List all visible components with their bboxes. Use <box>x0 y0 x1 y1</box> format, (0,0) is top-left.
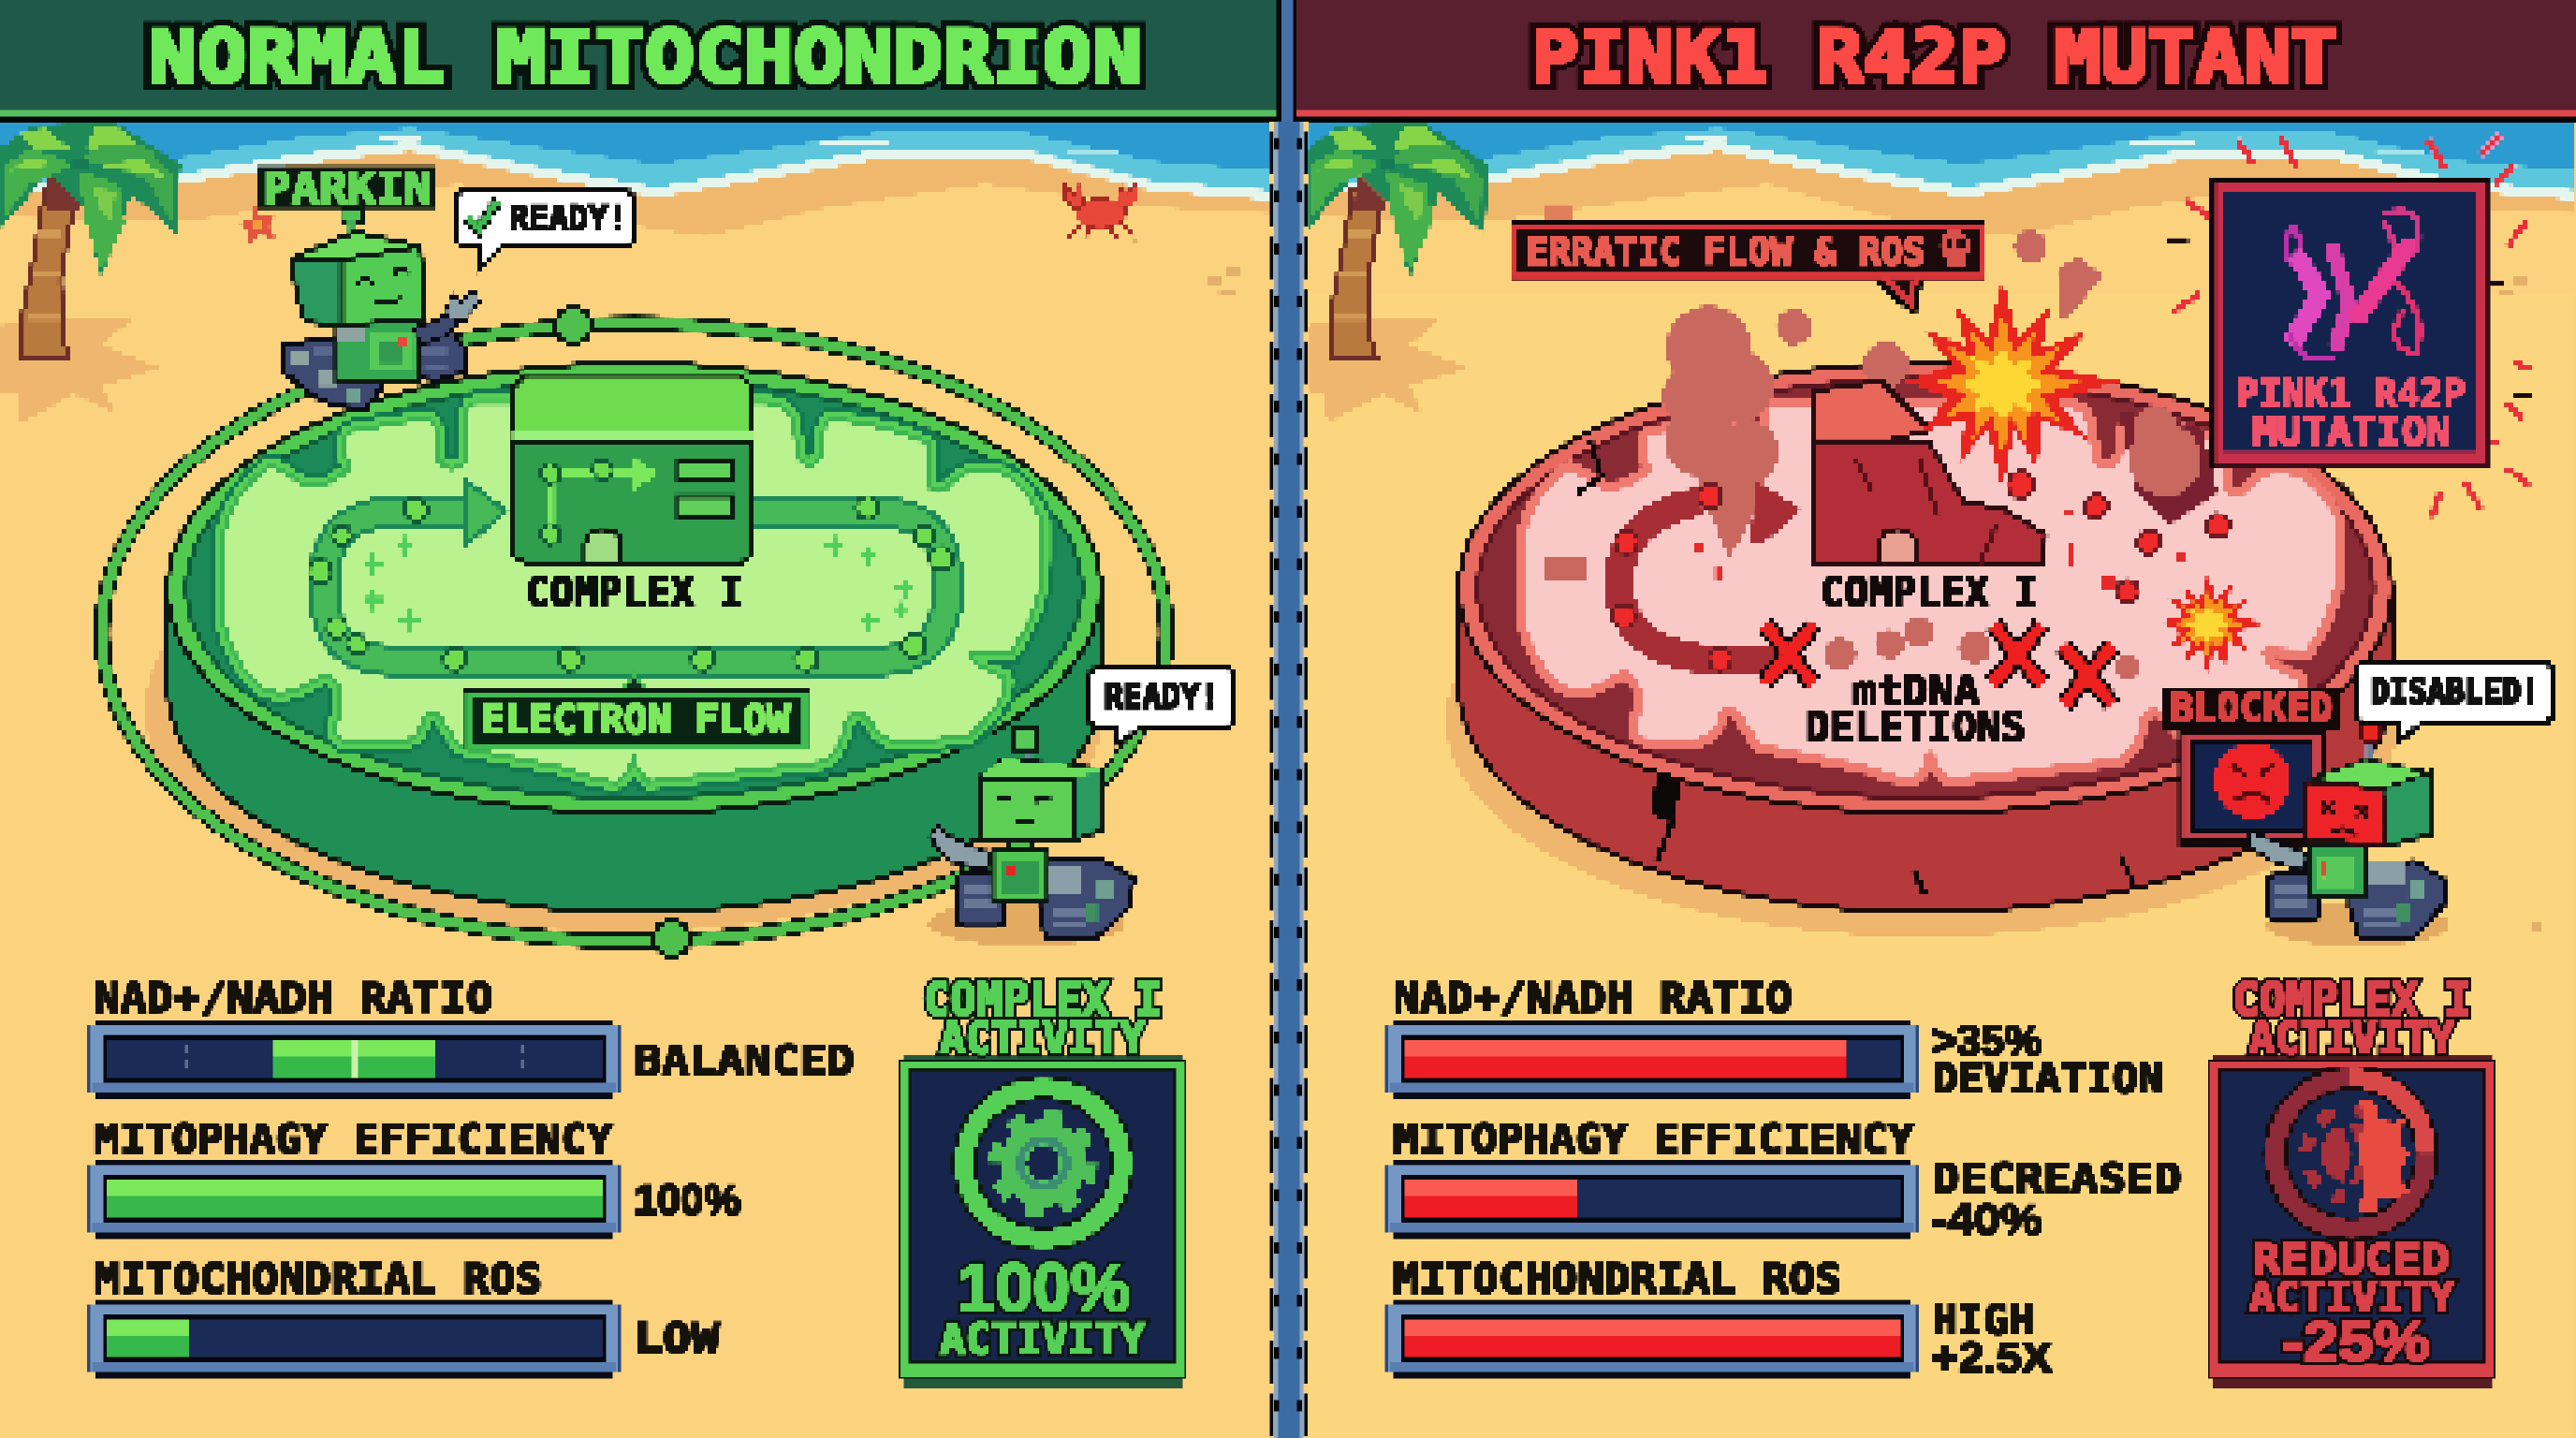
icon: skull <box>1940 230 1969 266</box>
title: normal: NORMAL MITOCHONDRION <box>148 16 1142 100</box>
speech bubble: ready 1 <box>455 191 634 271</box>
broken track <box>1618 501 1791 661</box>
beach scene: mutant side <box>1298 115 2576 1438</box>
value: high: HIGH <box>1932 1297 2034 1344</box>
bar: ROS mutant <box>1385 1299 1919 1379</box>
label: mitophagy mutant: MITOPHAGY EFFICIENCY <box>1393 1116 1914 1164</box>
robot: disabled <box>2247 723 2450 946</box>
smoke <box>1544 230 2202 681</box>
bars: normal metrics <box>87 1020 621 1379</box>
text: activity normal: COMPLEX I <box>923 973 1162 1027</box>
bar: NAD ratio mutant <box>1385 1020 1919 1099</box>
header: normal mitochondrion <box>0 0 1277 123</box>
panel: normal mitochondrion <box>0 115 1281 1438</box>
icon: angry face <box>2215 742 2291 818</box>
text: mutant scene labels <box>1526 230 2539 752</box>
value: low: LOW <box>634 1314 720 1362</box>
text: normal scene labels <box>263 164 1219 742</box>
label: ready 1: READY! <box>509 198 627 239</box>
panel: complex I activity normal <box>899 973 1186 1388</box>
header: PINK1 mutant <box>1296 0 2576 123</box>
mitochondrion: normal <box>102 307 1166 956</box>
panel: complex I activity mutant <box>2208 973 2496 1388</box>
icon: protein <box>2285 211 2420 360</box>
label: mutation: MUTATION <box>2252 409 2452 455</box>
complex I damaged <box>1814 381 2045 565</box>
value: decreased: DECREASED <box>1932 1155 2182 1203</box>
text: activity mutant: ACTIVITY <box>2249 1274 2455 1322</box>
value: balanced: BALANCED <box>634 1037 855 1085</box>
label: NAD ratio mutant: NAD+/NADH RATIO <box>1393 975 1793 1022</box>
speech bubble: ready 2 <box>1090 668 1234 744</box>
label: mutation title: PINK1 R42P <box>2236 371 2466 417</box>
bar: mitophagy efficiency <box>87 1160 621 1239</box>
value: +2.5X: +2.5X <box>1932 1334 2053 1382</box>
cracks <box>1577 440 2136 896</box>
electron flow track <box>309 479 953 670</box>
bar: mitophagy mutant <box>1385 1160 1919 1239</box>
title: mutant: PINK1 R42P MUTANT <box>1531 16 2338 100</box>
value: deviation: >35% <box>1932 1017 2042 1064</box>
value: -40%: -40% <box>1932 1196 2042 1243</box>
speech bubble: disabled <box>2356 662 2553 742</box>
bar: mitochondrial ROS <box>87 1299 621 1379</box>
robot: parkin top <box>283 207 479 411</box>
label: mtDNA: mtDNA <box>1852 668 1980 715</box>
label: blocked: BLOCKED <box>2170 684 2333 730</box>
text: activity normal: 100% <box>958 1249 1131 1327</box>
label: erratic flow: ERRATIC FLOW & ROS <box>1526 230 1925 274</box>
icon: X marks <box>1764 624 2113 705</box>
complex I block <box>513 374 753 565</box>
value: 100%: 100% <box>634 1176 741 1224</box>
bars: mutant metrics <box>1385 1020 1919 1379</box>
label: ROS: MITOCHONDRIAL ROS <box>94 1255 542 1303</box>
text: activity normal: ACTIVITY <box>940 1013 1146 1064</box>
text: activity normal <box>923 973 1162 1364</box>
label: ready 2: READY! <box>1104 676 1219 716</box>
label: parkin: PARKIN <box>263 164 432 215</box>
icon: gear ring <box>964 1088 1122 1239</box>
label: ROS mutant: MITOCHONDRIAL ROS <box>1393 1255 1841 1303</box>
parkin label box <box>258 166 437 209</box>
text: activity mutant: COMPLEX I <box>2232 973 2471 1027</box>
panel: PINK1 R42P mutant <box>1298 115 2576 1438</box>
label: deletions: DELETIONS <box>1806 704 2026 752</box>
beach scene: normal side <box>0 115 1281 1438</box>
value: deviation line 2: DEVIATION <box>1932 1055 2163 1103</box>
label: complex I damaged: COMPLEX I <box>1821 569 2037 617</box>
mitochondrion: damaged <box>1445 230 2398 936</box>
text: mutant metric labels <box>1393 975 2182 1382</box>
label: electron flow: ELECTRON FLOW <box>481 697 791 742</box>
bar: NAD ratio <box>87 1020 621 1099</box>
text: activity mutant: REDUCED <box>2252 1236 2450 1284</box>
icon: broken gear ring <box>2276 1078 2426 1229</box>
text: activity normal: ACTIVITY <box>940 1314 1146 1364</box>
label box: blocked + monitor <box>2163 688 2339 846</box>
text: activity mutant: ACTIVITY <box>2249 1013 2455 1064</box>
callout: electron flow box <box>463 674 810 751</box>
label: mitophagy: MITOPHAGY EFFICIENCY <box>94 1116 613 1164</box>
label: disabled: DISABLED! <box>2371 671 2539 712</box>
callout: erratic flow <box>1510 222 1986 314</box>
mutation box <box>2165 135 2533 518</box>
label: complex I: COMPLEX I <box>526 569 742 617</box>
text: activity mutant: -25% <box>2282 1310 2430 1372</box>
label: NAD ratio: NAD+/NADH RATIO <box>94 975 493 1022</box>
robot: parkin bottom <box>929 729 1134 946</box>
text: normal metric labels <box>94 975 855 1362</box>
text: activity mutant <box>2232 973 2471 1372</box>
divider <box>1270 0 1308 1438</box>
